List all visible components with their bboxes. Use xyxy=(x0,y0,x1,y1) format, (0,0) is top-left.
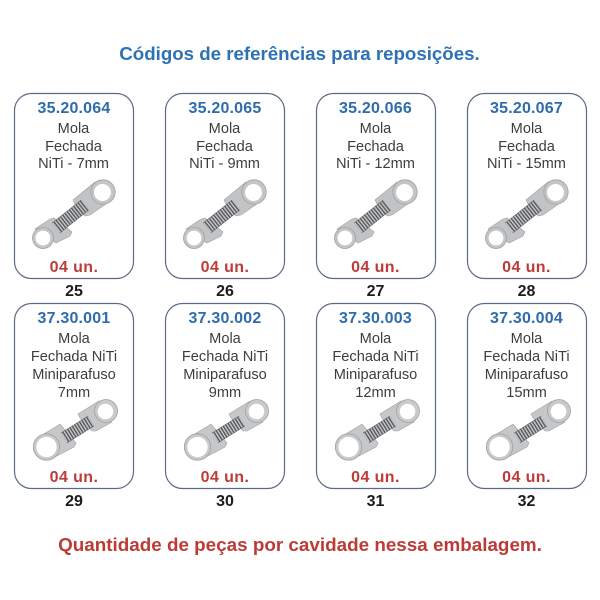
number 30: 30 xyxy=(216,493,234,510)
description 32 xyxy=(483,331,570,401)
quantity 31: 04 un. xyxy=(351,469,400,486)
description 30: Mola xyxy=(209,331,242,347)
description 25 xyxy=(38,121,109,172)
description 29: Miniparafuso xyxy=(32,367,116,383)
description 27: Mola xyxy=(360,121,392,137)
panel: item 25 xyxy=(14,94,134,278)
panel: item 29 xyxy=(14,304,134,488)
description 29: 7mm xyxy=(58,385,90,401)
icon: spring 28 xyxy=(486,180,568,248)
description 30 xyxy=(182,331,268,401)
description 27 xyxy=(336,121,415,172)
description 31 xyxy=(332,331,419,401)
number 27: 27 xyxy=(367,283,384,300)
description 28: NiTi - 15mm xyxy=(487,156,566,172)
quantity 27: 04 un. xyxy=(351,259,400,276)
quantity 29: 04 un. xyxy=(50,469,98,486)
code 35.20.066: 35.20.066 xyxy=(339,100,412,117)
number 29: 29 xyxy=(65,493,83,510)
description 26: NiTi - 9mm xyxy=(189,156,260,172)
number 25: 25 xyxy=(65,283,83,300)
number 28: 28 xyxy=(518,283,536,300)
description 26: Fechada xyxy=(196,139,254,155)
description 29: Fechada NiTi xyxy=(31,349,117,365)
description 30: Miniparafuso xyxy=(183,367,267,383)
code 35.20.064: 35.20.064 xyxy=(38,100,110,117)
icon: spring 26 xyxy=(184,180,266,248)
code 37.30.004: 37.30.004 xyxy=(490,310,563,327)
quantity 30: 04 un. xyxy=(201,469,249,486)
description 32: 15mm xyxy=(506,385,547,401)
description 28: Mola xyxy=(511,121,543,137)
description 32: Mola xyxy=(511,331,543,347)
description 30: Fechada NiTi xyxy=(182,349,268,365)
panel: item 32 xyxy=(468,304,586,488)
code 35.20.065: 35.20.065 xyxy=(189,100,261,117)
description 27: NiTi - 12mm xyxy=(336,156,415,172)
panel: item 26 xyxy=(166,94,284,278)
title: Códigos de referências para reposições. xyxy=(119,43,480,64)
quantity 32: 04 un. xyxy=(502,469,551,486)
description 26: Mola xyxy=(209,121,241,137)
description 25: NiTi - 7mm xyxy=(38,156,109,172)
description 31: 12mm xyxy=(355,385,396,401)
icon: spring 25 xyxy=(32,180,115,248)
number 32: 32 xyxy=(518,493,536,510)
code 37.30.003: 37.30.003 xyxy=(339,310,412,327)
code 37.30.002: 37.30.002 xyxy=(189,310,261,327)
description 31: Mola xyxy=(360,331,392,347)
quantity 28: 04 un. xyxy=(502,259,551,276)
icon: spring 29 xyxy=(33,400,117,460)
icon: spring 31 xyxy=(335,400,420,460)
description 31: Miniparafuso xyxy=(334,367,417,383)
description 28: Fechada xyxy=(498,139,556,155)
description 30: 9mm xyxy=(209,385,241,401)
description 25: Mola xyxy=(58,121,90,137)
description 31: Fechada NiTi xyxy=(332,349,419,365)
description 29 xyxy=(31,331,117,401)
description 28 xyxy=(487,121,566,172)
panel: item 30 xyxy=(166,304,284,488)
panel: item 27 xyxy=(316,94,436,278)
description 25: Fechada xyxy=(45,139,103,155)
code 35.20.067: 35.20.067 xyxy=(490,100,563,117)
panel: item 31 xyxy=(316,304,436,488)
description 27: Fechada xyxy=(347,139,405,155)
description 32: Fechada NiTi xyxy=(483,349,570,365)
quantity 25: 04 un. xyxy=(50,259,98,276)
number 31: 31 xyxy=(367,493,384,510)
quantity 26: 04 un. xyxy=(201,259,249,276)
footer note: Quantidade de peças por cavidade nessa embalagem. xyxy=(58,534,542,555)
icon: spring 32 xyxy=(486,400,570,460)
description 29: Mola xyxy=(58,331,91,347)
description 32: Miniparafuso xyxy=(485,367,568,383)
code 37.30.001: 37.30.001 xyxy=(38,310,110,327)
icon: spring 30 xyxy=(184,400,268,460)
number 26: 26 xyxy=(216,283,234,300)
panel: item 28 xyxy=(468,94,586,278)
icon: spring 27 xyxy=(334,180,417,248)
description 26 xyxy=(189,121,260,172)
